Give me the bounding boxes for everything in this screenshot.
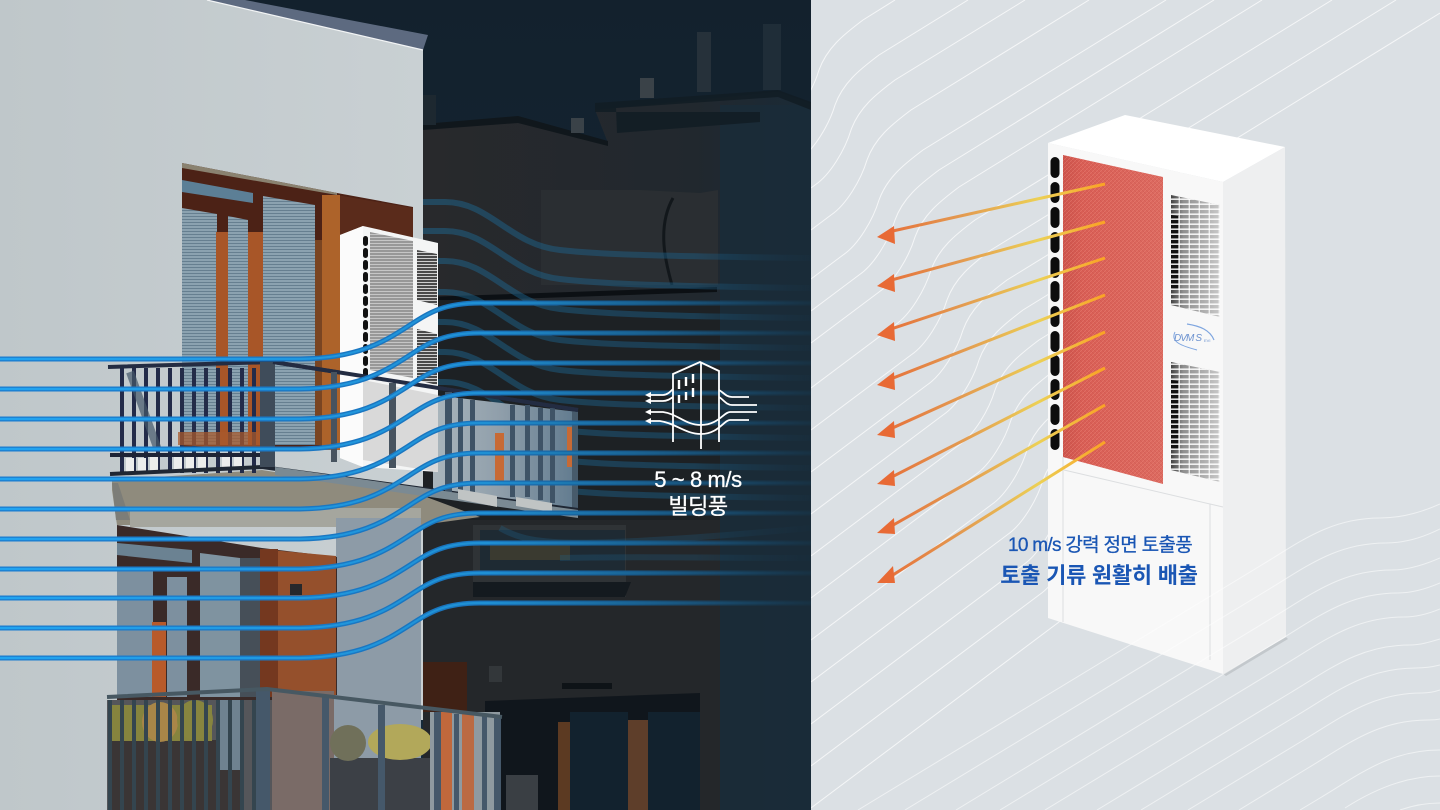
icon: building with wind [645, 362, 757, 449]
DVM S logo: DVM S [1174, 333, 1202, 344]
caption: discharge airflow [1000, 534, 1198, 588]
label: building wind speed: 빌딩풍 [668, 494, 728, 519]
red heat exchanger [1063, 155, 1163, 484]
caption: discharge airflow: 토출 기류 원활히 배출 [1000, 563, 1198, 588]
facade wall [0, 0, 423, 810]
building wind flow lines [0, 303, 811, 658]
vents column [363, 236, 368, 378]
label: building wind speed [654, 467, 742, 519]
faint wind lines over unit bottom and right [858, 504, 1440, 810]
bottom grille [1171, 362, 1220, 482]
unit top [1048, 115, 1285, 182]
photo: building facade and balconies [0, 0, 578, 810]
right outdoor unit [1048, 115, 1288, 676]
upper window [182, 163, 413, 450]
unit shadow [1223, 637, 1288, 676]
lower panel seams [1063, 457, 1223, 660]
gray mesh [370, 232, 413, 378]
roof edge [207, 0, 428, 50]
grilles [417, 250, 437, 305]
upper balcony rail left [110, 368, 262, 473]
right glass balcony section [433, 395, 578, 512]
caption: discharge airflow: 10 m/s 강력 정면 토출풍 [1008, 534, 1192, 556]
discharge arrows [877, 184, 1105, 583]
unit front [1048, 143, 1223, 674]
balcony post and rail lines [108, 362, 578, 410]
faint background wind lines on dark building [423, 202, 811, 558]
left outdoor unit [340, 226, 438, 472]
label: building wind speed: 5 ~ 8 m/s [654, 467, 742, 492]
balcony rail in front of unit [273, 362, 578, 518]
building silhouettes [421, 24, 811, 810]
dark photo panel background [0, 0, 811, 810]
balcony soffit and recess [112, 470, 480, 525]
DVM S logo: EVI [1204, 338, 1210, 343]
wind pattern lines [783, 0, 1440, 808]
top grille [1171, 195, 1220, 317]
vent holes [1050, 157, 1060, 450]
unit side [1223, 147, 1286, 674]
right panel background [811, 0, 1440, 810]
lower balcony [107, 689, 502, 810]
lower window and door [117, 525, 337, 700]
DVM S logo [1174, 324, 1214, 350]
